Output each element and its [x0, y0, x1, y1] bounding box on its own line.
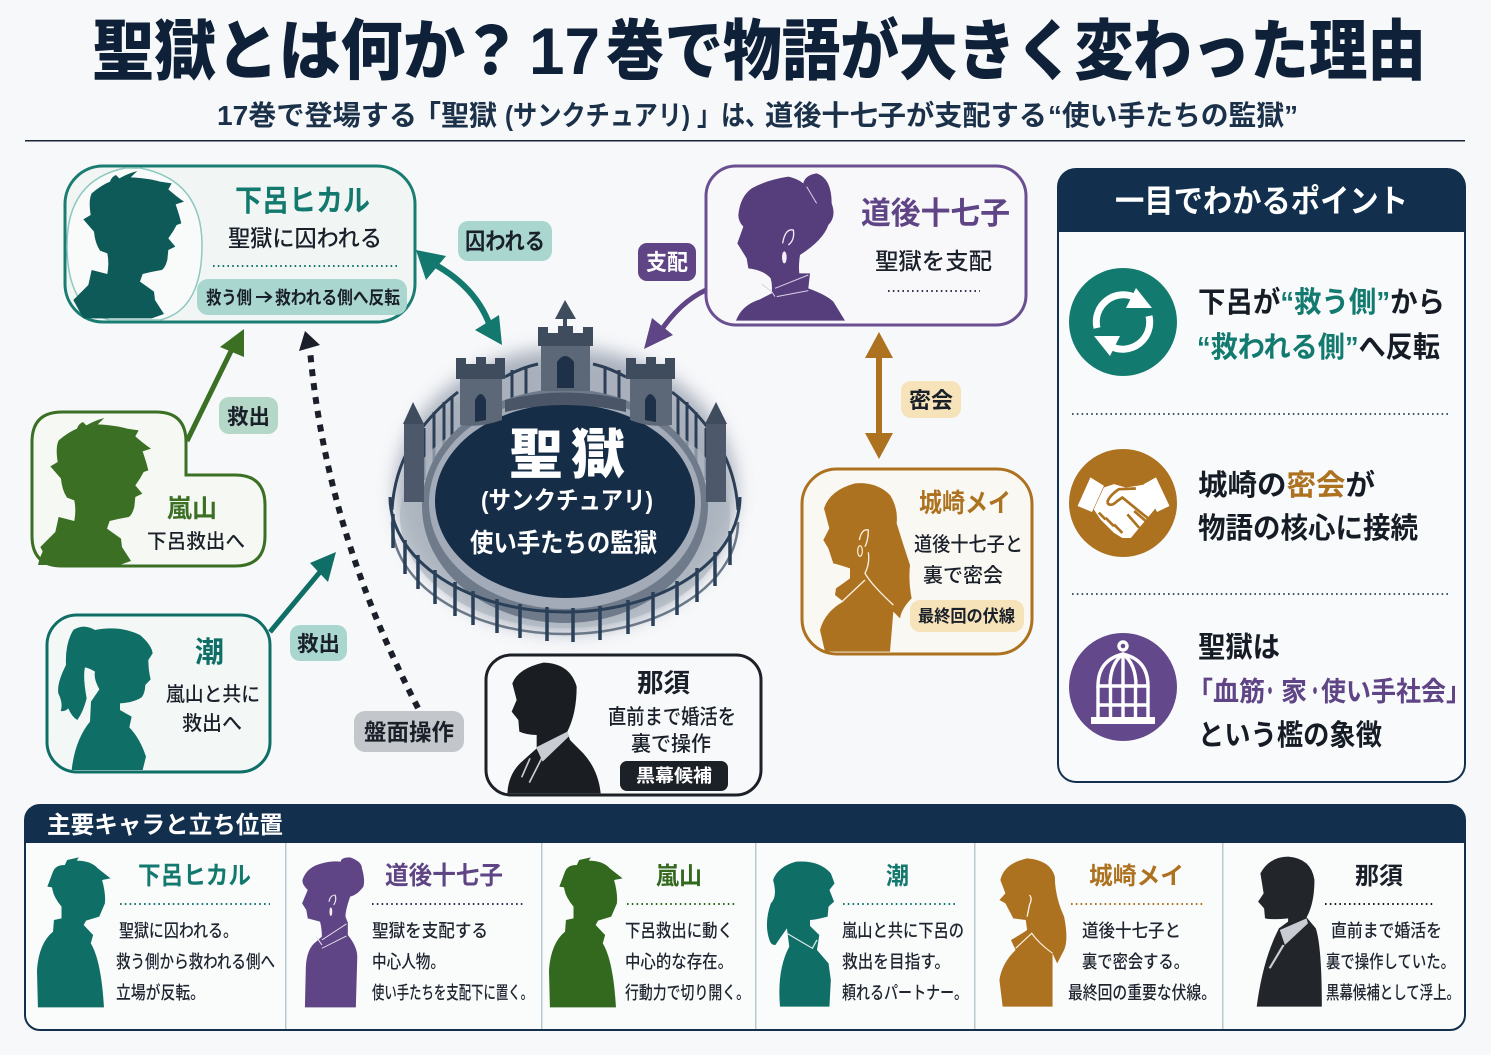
castle label text: (サンクチュアリ)	[481, 487, 653, 515]
name: Nasu: 那須	[637, 668, 690, 698]
status: Nasu: 直前まで婚活を	[608, 706, 736, 729]
panel: characters and positions	[25, 805, 1465, 1030]
silhouette: Jyogo	[736, 173, 845, 321]
label: secret meeting	[901, 381, 961, 418]
label: captured: 囚われる	[465, 228, 545, 254]
tag: foreshadowing: 最終回の伏線	[918, 606, 1015, 626]
column: Nasu	[1257, 857, 1460, 1007]
name: Jozaki: 城崎メイ	[919, 488, 1011, 518]
arrow: double teal between Hikaru and prison	[416, 250, 502, 345]
tag: reversal	[197, 279, 407, 315]
title: 17	[529, 14, 600, 88]
castle label text: 聖獄	[509, 425, 625, 485]
label: rescue (Ushio)	[290, 625, 347, 661]
label: secret meeting: 密会	[909, 388, 953, 413]
column: Hikaru	[37, 857, 275, 1007]
column: Ushio	[767, 861, 968, 1007]
text: point 2	[1198, 468, 1418, 545]
arrow: dotted Nasu manipulation	[299, 331, 418, 708]
text: point 1: “救われる側”へ反転	[1197, 331, 1440, 364]
label: rescue (Arashi)	[219, 397, 278, 434]
label: rescue (Arashi): 救出	[227, 406, 270, 429]
column: Arashiyama: 中心的な存在。	[625, 952, 733, 972]
castle label text: 使い手たちの監獄	[470, 528, 657, 558]
tag: foreshadowing	[910, 600, 1024, 632]
column: Jyogo: 道後十七子	[385, 862, 503, 890]
column: Ushio: 救出を目指す。	[842, 952, 950, 972]
text: point 3: 家	[1281, 677, 1307, 707]
title: ？	[460, 14, 522, 88]
column: Jyogo	[302, 857, 533, 1007]
status: Jyogo: 聖獄を支配	[875, 248, 992, 274]
card: Jozaki Mei	[802, 469, 1032, 654]
column: Hikaru: 聖獄に囚われる。	[119, 921, 238, 941]
label: board manipulation	[354, 711, 464, 752]
front fence	[390, 497, 740, 642]
text: point 3	[1187, 631, 1471, 752]
column: Hikaru: 救う側から救われる側へ	[116, 952, 275, 972]
status: Ushio: 救出へ	[182, 712, 242, 735]
column: Jyogo: 中心人物。	[372, 952, 445, 972]
heading: characters: 主要キャラと立ち位置	[47, 812, 283, 839]
tag: mastermind	[620, 761, 728, 791]
subtitle: 道後十七子が支配する	[765, 99, 1047, 131]
subtitle: 」は、	[697, 100, 769, 131]
text: point 3: という檻の象徴	[1198, 719, 1382, 752]
castle label text	[470, 425, 657, 558]
text: point 3: ・	[1263, 677, 1277, 707]
tag: reversal: 救う側	[206, 288, 252, 308]
text: point 3: 使い手社会」	[1321, 677, 1471, 707]
icon: reversal arrows	[1069, 268, 1177, 376]
name: Hikaru: 下呂ヒカル	[235, 185, 370, 218]
text: point 1	[1197, 285, 1445, 364]
card: Ushio	[47, 615, 270, 772]
column: Ushio: 潮	[886, 863, 909, 890]
label: rescue (Ushio): 救出	[297, 633, 340, 656]
card: Gero Hikaru	[65, 166, 415, 322]
status: Jozaki: 裏で密会	[923, 564, 1003, 587]
subtitle	[217, 99, 1298, 131]
silhouette: Nasu	[507, 663, 601, 793]
column: Nasu: 裏で操作していた。	[1326, 952, 1455, 972]
status: Nasu: 裏で操作	[631, 733, 711, 756]
text: point 3: 「血筋	[1187, 677, 1265, 707]
column: Hikaru: 下呂ヒカル	[138, 862, 251, 890]
status: Nasu	[608, 706, 736, 756]
text: point 3: 聖獄は	[1198, 631, 1280, 664]
column: Jyogo: 聖獄を支配する	[372, 921, 488, 941]
column: Nasu: 那須	[1355, 863, 1403, 890]
arrow: double gold between Jyogo and Jozaki	[865, 332, 893, 459]
tag: mastermind: 黒幕候補	[636, 766, 712, 786]
silhouette: Ushio	[58, 627, 153, 770]
column: Jozaki: 道後十七子と	[1082, 921, 1181, 941]
column: Ushio: 嵐山と共に下呂の	[842, 921, 964, 941]
column: Arashiyama: 行動力で切り開く。	[625, 983, 750, 1003]
column: Hikaru: 立場が反転。	[116, 982, 205, 1003]
card: Arashiyama	[32, 412, 265, 566]
subtitle: “使い手たちの監獄”	[1048, 100, 1298, 131]
subtitle: 「聖獄	[413, 100, 497, 131]
status: Jozaki	[914, 533, 1023, 587]
name: Arashiyama: 嵐山	[167, 495, 217, 523]
status: Ushio	[166, 683, 260, 735]
status: Arashiyama: 下呂救出へ	[147, 530, 245, 553]
text: point 3: ・	[1308, 677, 1322, 707]
central illustration: sanctuary prison	[390, 300, 740, 642]
status: Ushio: 嵐山と共に	[166, 683, 260, 706]
label: control: 支配	[646, 250, 688, 275]
column: Jozaki: 裏で密会する。	[1082, 952, 1189, 972]
subtitle: (サンクチュアリ)	[505, 100, 690, 131]
arrow: Ushio to centre	[270, 552, 336, 632]
arrow: Arashi to Hikaru	[187, 329, 244, 441]
status: Hikaru: 聖獄に囚われる	[228, 225, 382, 251]
column: Arashiyama: 嵐山	[656, 863, 702, 890]
icon: bird cage	[1069, 633, 1177, 741]
column: Jozaki	[999, 858, 1216, 1007]
column: Nasu: 直前まで婚活を	[1331, 921, 1442, 941]
column: Ushio: 頼れるパートナー。	[842, 983, 968, 1003]
tag: reversal: 救われる側へ反転	[275, 288, 400, 308]
title	[92, 14, 1426, 88]
label: board manipulation: 盤面操作	[364, 719, 454, 745]
name: Jyogo: 道後十七子	[861, 196, 1010, 231]
column: Jozaki: 最終回の重要な伏線。	[1068, 983, 1216, 1003]
status: Jozaki: 道後十七子と	[914, 533, 1023, 556]
icon: handshake	[1069, 449, 1177, 557]
text: point 1: 下呂が“救う側”から	[1198, 285, 1445, 319]
title: 聖獄とは何か	[92, 14, 465, 88]
column: Arashiyama	[549, 857, 750, 1007]
subtitle: 17巻で登場する	[217, 100, 417, 131]
name: Ushio: 潮	[195, 636, 224, 669]
heading: key points: 一目でわかるポイント	[1115, 183, 1408, 219]
silhouette: Arashiyama	[38, 418, 151, 565]
panel: key points	[1058, 169, 1471, 782]
card: Nasu	[486, 655, 761, 795]
label: control	[638, 243, 696, 281]
arrow: Jyogo to prison	[644, 290, 706, 349]
label: captured	[458, 221, 552, 261]
column: Jozaki: 城崎メイ	[1089, 862, 1184, 890]
text: point 2: 物語の核心に接続	[1198, 512, 1418, 545]
silhouette: Hikaru	[73, 171, 184, 318]
text: point 2: 城崎の密会が	[1198, 468, 1375, 502]
column: Arashiyama: 下呂救出に動く	[625, 921, 733, 941]
card: Dogo Jyogo	[706, 166, 1026, 325]
silhouette: Jozaki	[820, 483, 912, 652]
column: Jyogo: 使い手たちを支配下に置く。	[372, 983, 533, 1003]
